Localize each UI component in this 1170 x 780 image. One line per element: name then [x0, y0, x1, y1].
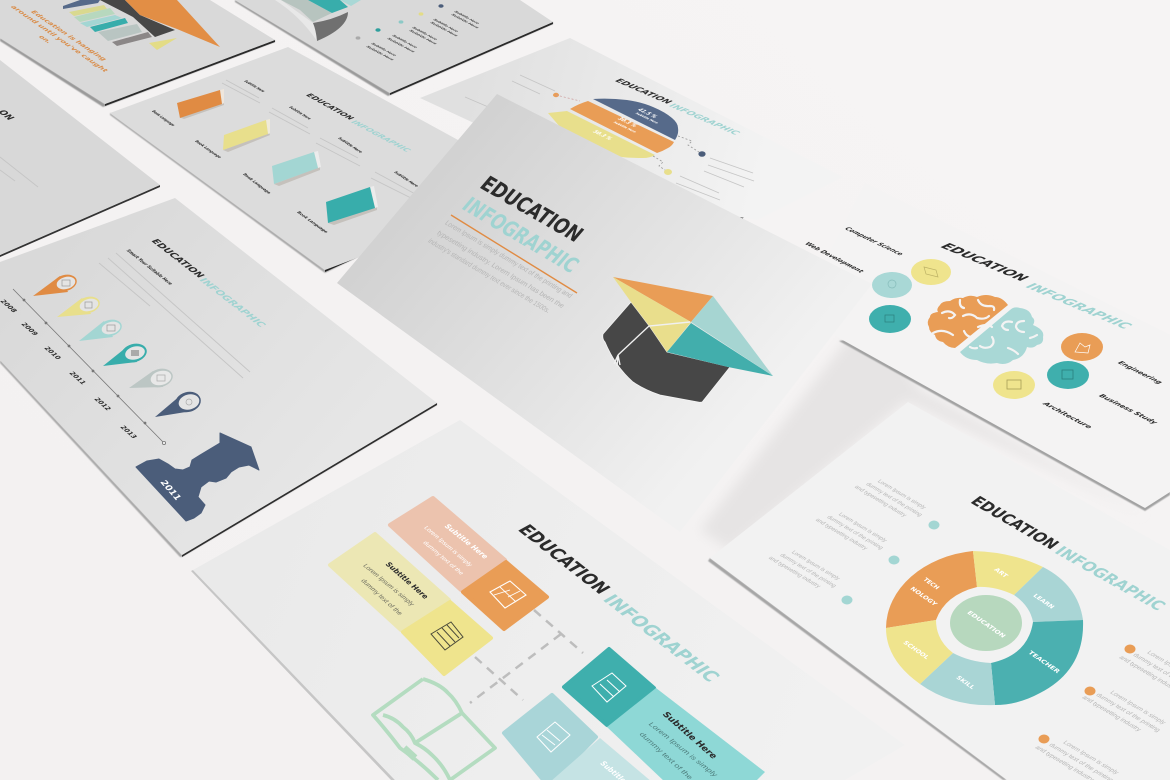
box: orange icon — [463, 562, 547, 629]
box: pale teal subtitle — [550, 738, 652, 780]
box: peach subtitle: Subtitle Here — [442, 523, 491, 560]
labels: timeline notes: Subtitle Here — [453, 10, 482, 25]
labels: book language: Book Language — [295, 211, 329, 234]
labels: fields of study — [802, 226, 1164, 430]
timeline dots — [356, 4, 444, 40]
soft shadows between cards — [700, 310, 1145, 550]
icon: architecture circle — [993, 371, 1035, 399]
text: note 3: Lorem Ipsum is simply — [790, 550, 841, 581]
icon: business study circle — [1047, 361, 1089, 389]
labels: fields of study: Engineering — [1115, 360, 1164, 385]
text: main body: Lorem Ipsum is simply dummy text of the printing and — [443, 219, 574, 300]
text: note 1: and typesetting industry — [853, 485, 907, 518]
heading: books title: INFOGRAPHIC — [349, 119, 414, 153]
divider: orange rule — [451, 215, 577, 293]
text: note 2 — [814, 507, 891, 556]
text: note 3: dummy text of the printing — [778, 553, 837, 589]
labels: years: 2011 — [67, 371, 88, 385]
box: light teal icon — [504, 695, 596, 780]
heading: main title — [457, 173, 588, 278]
labels: timeline notes: Subtitle Here — [391, 34, 420, 49]
chart: education donut — [886, 551, 1083, 705]
text: quote: Education is hanging — [29, 10, 108, 62]
chart: stacked dome: Subtitle Here — [634, 112, 660, 124]
labels: timeline notes: Subtitle Here — [450, 13, 481, 29]
labels: years: 2013 — [118, 425, 139, 439]
labels: book language: Book Language — [241, 173, 272, 195]
icon: graduate head silhouette — [136, 433, 259, 521]
text: note 3: and typesetting industry — [767, 556, 821, 589]
subtitle: Smart Your Suitable Here — [124, 249, 173, 286]
text: quote: on. — [37, 35, 53, 44]
panel: top left card — [0, 0, 275, 107]
chart: stacked dome: 41.5 % — [635, 107, 660, 119]
text: main body: industry's standard dummy text ever since the 1500s. — [426, 237, 552, 315]
icon: light teal pin — [79, 317, 124, 341]
box: peach subtitle: Lorem Ipsum is simply — [422, 525, 474, 568]
labels: book language: Book Language — [193, 140, 223, 159]
labels: timeline notes: Subtitle Here — [370, 42, 399, 57]
box: peach subtitle: dummy text of the — [421, 540, 465, 576]
box: yellow subtitle: dummy text of the — [359, 578, 403, 617]
icon: dark teal book — [326, 186, 378, 225]
heading: main title: INFOGRAPHIC — [457, 194, 583, 278]
body lines — [99, 253, 250, 378]
labels: timeline notes: Subtitle Here — [432, 18, 461, 33]
chart: education donut: TECH — [921, 577, 941, 591]
heading: flow title: INFOGRAPHIC — [598, 592, 724, 685]
chart: stacked dome — [548, 99, 678, 158]
labels: years: 2012 — [92, 397, 113, 411]
chart: education donut: SCHOOL — [901, 640, 931, 661]
chart: stacked dome: 50.3 % — [590, 129, 615, 141]
chart: curved stack — [275, 0, 361, 41]
text: note 6: Lorem Ipsum is simply — [1061, 740, 1121, 776]
icon: light teal book — [272, 151, 321, 186]
icon: yellow pin — [57, 294, 102, 317]
labels: years: 2010 — [42, 346, 63, 360]
heading: timeline title: EDUCATION — [148, 238, 206, 279]
heading: pie title: EDUCATION — [966, 493, 1063, 552]
labels: years — [0, 299, 139, 439]
box: teal subtitle: Lorem Ipsum is simply — [646, 721, 720, 778]
dots: right notes — [1038, 644, 1136, 744]
panel: left cropped card — [0, 60, 160, 257]
icon: computer science circle — [911, 259, 951, 285]
text: note 4 — [1117, 643, 1170, 699]
heading: books title: EDUCATION — [304, 92, 357, 121]
panel: brain card — [800, 183, 1170, 511]
labels: years: 2009 — [19, 322, 40, 336]
heading: brain card title — [936, 242, 1136, 331]
chart: education donut: TEACHER — [1026, 650, 1062, 675]
labels: timeline notes: Subtitle Here — [408, 29, 439, 45]
text: note 2: dummy text of the printing — [825, 515, 884, 551]
labels: fields of study: Web Development — [802, 241, 866, 274]
icon: orange book — [177, 89, 224, 119]
panel: flow card — [191, 420, 905, 780]
text: note 5 — [1080, 683, 1170, 739]
panel: top centre card — [420, 38, 843, 222]
labels: subtitles: Subtitle Here — [336, 137, 364, 154]
icon: gray pin — [129, 366, 175, 390]
panel: pie card — [708, 402, 1170, 780]
box: teal subtitle — [607, 688, 765, 780]
text: note 5: Lorem Ipsum is simply — [1108, 690, 1168, 726]
labels: timeline notes: Subtitle Here — [411, 26, 440, 41]
icon: web development circle — [872, 272, 912, 298]
icon: dark teal pin — [103, 341, 149, 366]
text: note 2: Lorem Ipsum is simply — [837, 512, 888, 543]
labels: timeline notes: Subtitle Here — [429, 21, 460, 37]
text: quote: around until you've caught — [9, 5, 110, 73]
heading: flow title — [513, 522, 724, 685]
icon: graduate head silhouette: 2011 — [157, 479, 183, 502]
panel: main education card — [337, 94, 872, 532]
labels: fields of study: Computer Science — [842, 226, 906, 256]
labels: fields of study: Business Study — [1096, 393, 1160, 425]
heading: brain card title: EDUCATION — [936, 242, 1032, 283]
labels: fields of study: Architecture — [1040, 401, 1095, 430]
callouts: dots and notes — [465, 75, 754, 200]
heading: card title — [611, 78, 742, 136]
labels: subtitles: Subtitle Here — [287, 106, 312, 120]
chart: bars and pencil — [63, 0, 220, 50]
box: yellow subtitle: Lorem Ipsum is simply — [361, 563, 416, 607]
chart: education donut: NOLOGY — [908, 586, 939, 608]
heading: card title: EDUCATION — [611, 78, 674, 105]
labels: subtitles: Subtitle Here — [392, 171, 420, 188]
text: note 2: and typesetting industry — [814, 518, 868, 551]
labels: subtitles — [242, 80, 420, 188]
heading: pie title — [966, 493, 1170, 614]
chart: education donut: SKILL — [954, 675, 976, 691]
heading: card title: INFOGRAPHIC — [665, 103, 742, 136]
box: peach subtitle — [390, 498, 505, 590]
text: note 1 — [853, 474, 930, 523]
labels: book language — [150, 110, 329, 234]
icon: teal circle — [869, 305, 911, 333]
box: teal subtitle: dummy text of the — [637, 731, 695, 780]
chart: stacked dome: 30.3 % — [615, 116, 640, 128]
heading: timeline title — [148, 238, 267, 328]
connectors — [470, 610, 583, 703]
heading: timeline title: INFOGRAPHIC — [196, 277, 267, 328]
heading: main title: EDUCATION — [475, 173, 588, 247]
chart: education donut: ART — [992, 567, 1010, 580]
text: note 3 — [767, 545, 844, 594]
dots: left notes — [842, 520, 940, 604]
panel: books card — [110, 47, 480, 273]
labels: book language: Book Language — [150, 110, 176, 127]
heading: flow title: EDUCATION — [513, 522, 614, 597]
panel: timeline card — [0, 198, 437, 557]
box: yellow icon — [403, 602, 491, 674]
icon: open book — [373, 679, 495, 780]
box: yellow subtitle: Subtitle Here — [383, 561, 431, 600]
chart: education donut: EDUCATION — [965, 610, 1007, 639]
text: main body: typesetting industry. Lorem Ipsum has been the — [435, 229, 566, 310]
chart: education donut: LEARN — [1031, 593, 1056, 610]
box: dark teal icon — [564, 649, 654, 725]
text: note 1: dummy text of the printing — [864, 482, 923, 518]
icon: navy pin — [155, 389, 203, 417]
text: note 6 — [1033, 733, 1123, 780]
text: note 5: and typesetting industry — [1080, 695, 1143, 733]
note lines — [222, 80, 417, 200]
text: note 5: dummy text of the printing — [1094, 692, 1162, 733]
timeline axis — [13, 289, 166, 445]
text: note 1: Lorem Ipsum is simply — [876, 479, 927, 510]
icon: orange pin — [33, 272, 79, 296]
heading: brain card title: INFOGRAPHIC — [1021, 282, 1136, 331]
labels: timeline notes: Subtitle Here — [386, 37, 417, 53]
body lines — [0, 157, 38, 187]
panel: top centre-left card — [235, 0, 553, 96]
icon: yellow book — [223, 119, 270, 152]
chart: brain — [928, 295, 1043, 364]
box: teal subtitle: Subtitle Here — [660, 710, 719, 761]
icon: graduation cap — [603, 277, 773, 402]
chart: stacked dome: Subtitle Here — [612, 121, 638, 133]
heading: books title — [304, 92, 414, 153]
box: yellow subtitle — [330, 534, 449, 630]
labels: timeline notes — [365, 10, 482, 61]
icon: engineering circle — [1061, 333, 1103, 361]
labels: timeline notes: Subtitle Here — [365, 45, 396, 61]
labels: subtitles: Subtitle Here — [242, 80, 266, 93]
